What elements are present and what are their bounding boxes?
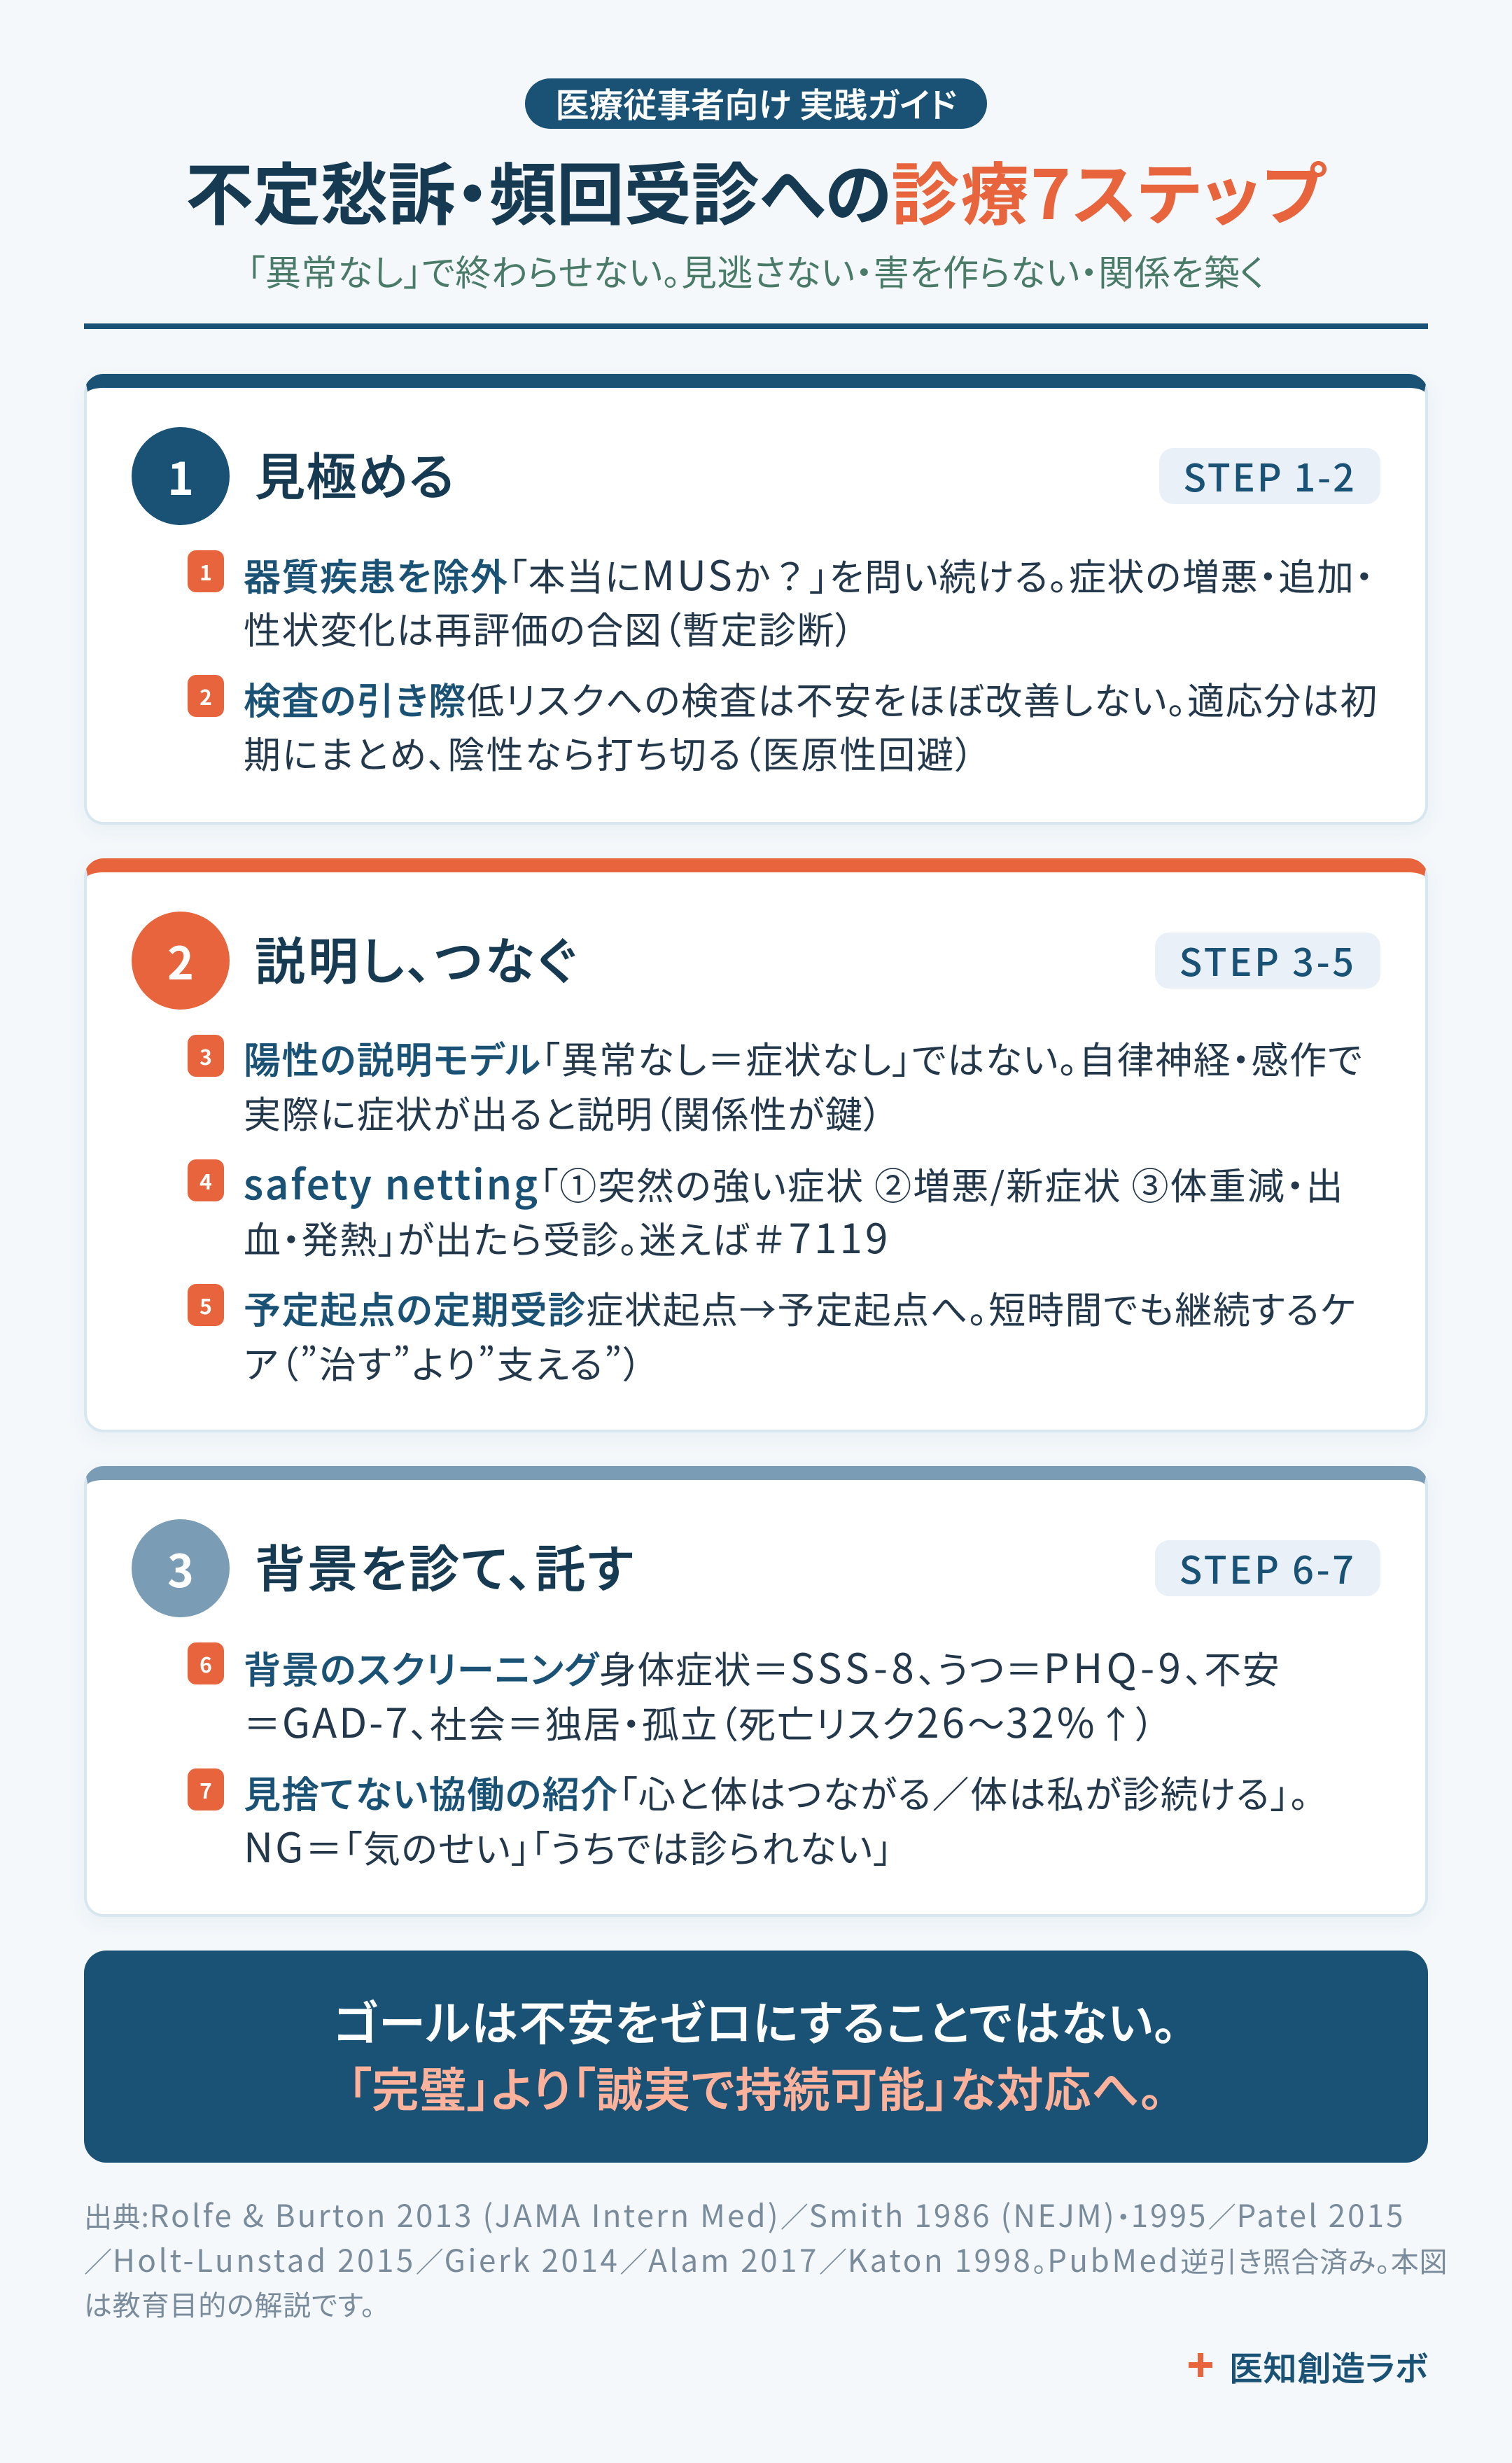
number badge 4 (188, 1159, 224, 1201)
item 4 text: safety netting「①突然の強い症状 ②増悪/新症状 ③体重減・出 (244, 1152, 1345, 1211)
circle number 2: 2 (167, 928, 194, 993)
callout line 2: 「完璧」より「誠実で持続可能」な対応へ。 (348, 2053, 1164, 2121)
icon: plus (1189, 2353, 1212, 2377)
panel: step group 3 (84, 1466, 1428, 1918)
item 1 text: 性状変化は再評価の合図（暫定診断） (244, 601, 855, 655)
heading: 背景を診て、託す: 背景を診て、託す (255, 1528, 636, 1602)
brand name: 医知創造ラボ (1229, 2341, 1428, 2390)
card 3 background (84, 1466, 1428, 1917)
number badge 1 (188, 550, 224, 592)
item 1 text: 器質疾患を除外「本当にMUSか？」を問い続ける。症状の増悪・追加・ (244, 543, 1375, 602)
number badge 3 (188, 1035, 224, 1077)
item 6 text: ＝GAD-7、社会＝独居・孤立（死亡リスク26～32%↑） (244, 1690, 1156, 1750)
item 7 text: NG＝「気のせい」「うちでは診られない」 (244, 1815, 893, 1874)
item 6 text: 背景のスクリーニング身体症状＝SSS-8、うつ＝PHQ-9、不安 (244, 1635, 1280, 1695)
header badge: 医療従事者向け 実践ガイド (556, 78, 956, 127)
item 2 text: 検査の引き際低リスクへの検査は不安をほぼ改善しない。適応分は初 (244, 672, 1378, 725)
item 3 text: 陽性の説明モデル「異常なし＝症状なし」ではない。自律神経・感作で (244, 1031, 1363, 1084)
number badge 2 (188, 675, 224, 717)
circle number 2 (132, 912, 230, 1010)
card 1 background (84, 374, 1428, 825)
number badge 5: 5 (200, 1290, 212, 1320)
item 5 text: ア（”治す”より”支える”） (244, 1336, 643, 1389)
callout: goal message (84, 1951, 1428, 2163)
panel: step group 1 (84, 374, 1428, 826)
card 2 background (84, 858, 1428, 1432)
source note: は教育目的の解説です。 (84, 2283, 376, 2324)
number badge 7: 7 (200, 1774, 212, 1805)
number badge 3: 3 (200, 1040, 212, 1071)
source note: 出典:Rolfe & Burton 2013 (JAMA Intern Med)／Smith 1986 (NEJM)・1995／Patel 2015 (84, 2191, 1406, 2236)
item 1 text (244, 543, 1375, 655)
step range tag 1-2: STEP 1-2 (1183, 447, 1357, 503)
item 2 text (244, 672, 1378, 779)
number badge 6 (188, 1642, 224, 1684)
circle number 1 (132, 427, 230, 525)
source note (84, 2191, 1448, 2324)
item 6 text (244, 1635, 1280, 1750)
item 5 text (244, 1281, 1356, 1389)
item 3 text (244, 1031, 1363, 1139)
item 3 text: 実際に症状が出ると説明（関係性が鍵） (244, 1086, 883, 1139)
circle number 3 (132, 1519, 230, 1617)
item 7 text: 見捨てない協働の紹介「心と体はつながる／体は私が診続ける」。 (244, 1766, 1310, 1819)
item 2 text: 期にまとめ、陰性なら打ち切る（医原性回避） (244, 726, 975, 779)
title: 不定愁訴・頻回受診への診療7ステップ (186, 140, 1326, 239)
subtitle: 「異常なし」で終わらせない。見逃さない・害を作らない・関係を築く (247, 244, 1265, 296)
source note: ／Holt-Lunstad 2015／Gierk 2014／Alam 2017／Katon 1998。PubMed逆引き照合済み。本図 (84, 2236, 1448, 2281)
number badge 5 (188, 1284, 224, 1326)
circle number 3: 3 (167, 1536, 194, 1600)
item 7 text (244, 1766, 1310, 1874)
panel: step group 2 (84, 858, 1428, 1434)
item 4 text (244, 1152, 1345, 1265)
item 5 text: 予定起点の定期受診症状起点→予定起点へ。短時間でも継続するケ (244, 1281, 1356, 1334)
circle number 1: 1 (167, 444, 194, 508)
item 4 text: 血・発熱」が出たら受診。迷えば＃7119 (244, 1206, 890, 1265)
step range tag 6-7: STEP 6-7 (1179, 1540, 1357, 1595)
brand credit (1189, 2341, 1428, 2390)
heading: 説明し、つなぐ: 説明し、つなぐ (255, 921, 578, 994)
number badge 7 (188, 1768, 224, 1810)
number badge 2: 2 (200, 681, 212, 711)
step range tag 3-5: STEP 3-5 (1179, 932, 1357, 987)
number badge 1: 1 (200, 556, 212, 587)
header divider (84, 323, 1428, 329)
number badge 6: 6 (200, 1648, 212, 1679)
number badge 4: 4 (200, 1165, 212, 1196)
heading: 見極める: 見極める (255, 436, 455, 510)
callout line 1: ゴールは不安をゼロにすることではない。 (334, 1986, 1178, 2054)
